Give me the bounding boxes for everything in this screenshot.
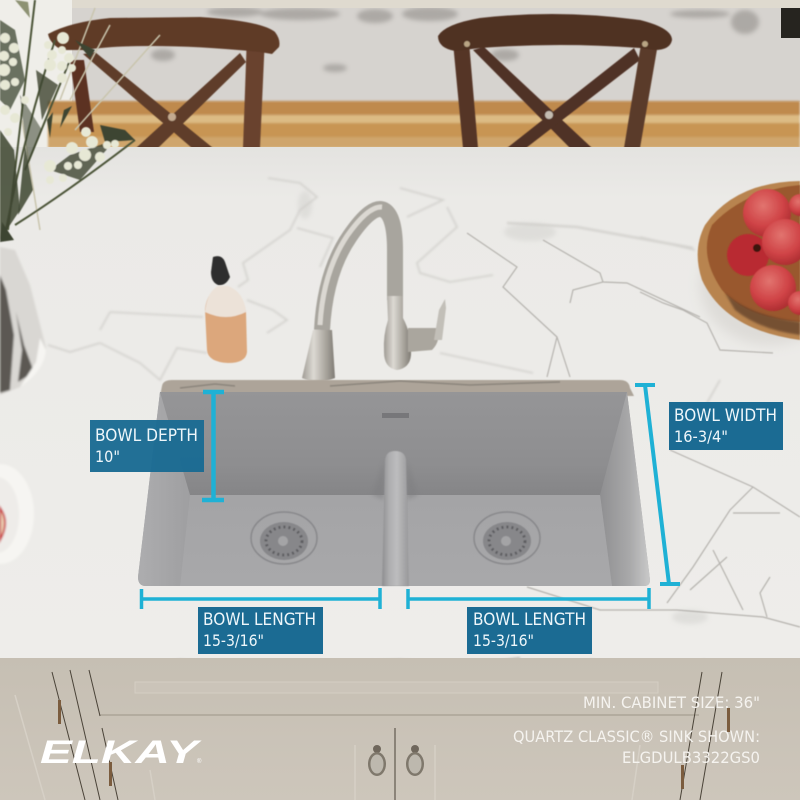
bowl depth label (90, 420, 204, 472)
marble countertop (0, 147, 800, 659)
back wall (160, 392, 627, 495)
window glare at left of room (0, 0, 72, 148)
soap dispenser (205, 256, 247, 363)
left bowl floor (180, 495, 384, 586)
right drain (474, 512, 540, 564)
bowl width bracket (635, 385, 680, 584)
cabinet (0, 658, 800, 800)
Elkay logo (40, 734, 202, 770)
countertop front edge veins (120, 658, 705, 668)
faucet base (302, 330, 335, 382)
bench at top of room (72, 0, 800, 8)
left wall (138, 392, 200, 586)
faucet (302, 207, 446, 382)
glass vase (0, 247, 46, 395)
faucet body (384, 296, 411, 370)
sink shown note: QUARTZ CLASSIC® SINK SHOWN: (513, 727, 760, 746)
leaves (0, 0, 135, 242)
sink badge (382, 413, 409, 418)
bowl depth label: BOWL DEPTH (95, 426, 198, 445)
cabinet knob left (368, 745, 386, 776)
pale stems (22, 8, 160, 230)
soft marble clouds (298, 191, 708, 624)
model number: ELGDULB3322GS0 (622, 748, 760, 767)
drawer relief (135, 682, 658, 693)
apples (727, 189, 800, 315)
cabinet size note: MIN. CABINET SIZE: 36" (583, 693, 760, 712)
rim veining (180, 381, 560, 388)
cabinet knob right (406, 745, 424, 776)
sink basin base (138, 392, 650, 586)
right bowl floor (408, 495, 612, 586)
left length label (198, 607, 323, 654)
right length label (467, 607, 592, 654)
dark knot on bowl rim (725, 293, 800, 335)
room background: rug (0, 0, 800, 102)
bowl interior (707, 185, 800, 322)
dark object at top right (781, 8, 800, 38)
dimension: bowl length right (408, 588, 649, 654)
plate with apple slice (0, 464, 34, 564)
bowl width label: 16-3/4" (674, 427, 728, 446)
right wall (600, 392, 650, 586)
left length bracket (142, 588, 380, 609)
spout highlight (320, 207, 382, 325)
bowl depth bracket (202, 392, 224, 500)
right length label: BOWL LENGTH (473, 610, 586, 629)
divider side shadows (372, 460, 418, 500)
plant (0, 0, 160, 242)
flowers (0, 32, 119, 184)
hinges (58, 700, 730, 789)
bowl width label (669, 402, 783, 450)
wooden fruit bowl (698, 181, 800, 345)
Elkay logo: ELKAY (40, 734, 202, 770)
door recess lines (15, 695, 640, 800)
marble veins dark (467, 233, 800, 627)
center divider (382, 451, 409, 586)
cabinet door seams (52, 670, 722, 800)
rug pattern (151, 7, 759, 72)
drawer bottom shadow (100, 714, 699, 716)
chair right (438, 14, 672, 148)
sink (138, 380, 650, 586)
dimension: bowl depth (90, 392, 224, 500)
left drain (251, 512, 317, 564)
dimension: bowl width (635, 385, 783, 584)
left length label: BOWL LENGTH (203, 610, 316, 629)
cabinet body (0, 658, 800, 800)
dimension: bowl length left (142, 588, 380, 654)
dark stems (5, 0, 135, 235)
bowl depth label: 10" (95, 447, 120, 466)
marble veins light (48, 178, 720, 403)
bowl body (698, 181, 800, 340)
bowl shadow (700, 225, 800, 345)
right length bracket (408, 588, 649, 609)
Elkay logo: ® (197, 758, 202, 765)
bowl width label: BOWL WIDTH (674, 406, 777, 425)
left length label: 15-3/16" (203, 631, 264, 650)
faucet handle (408, 328, 438, 352)
right length label: 15-3/16" (473, 631, 534, 650)
chair left (48, 17, 280, 148)
wood floor (48, 101, 800, 148)
sink rim (160, 380, 634, 396)
faucet spout (322, 209, 395, 330)
